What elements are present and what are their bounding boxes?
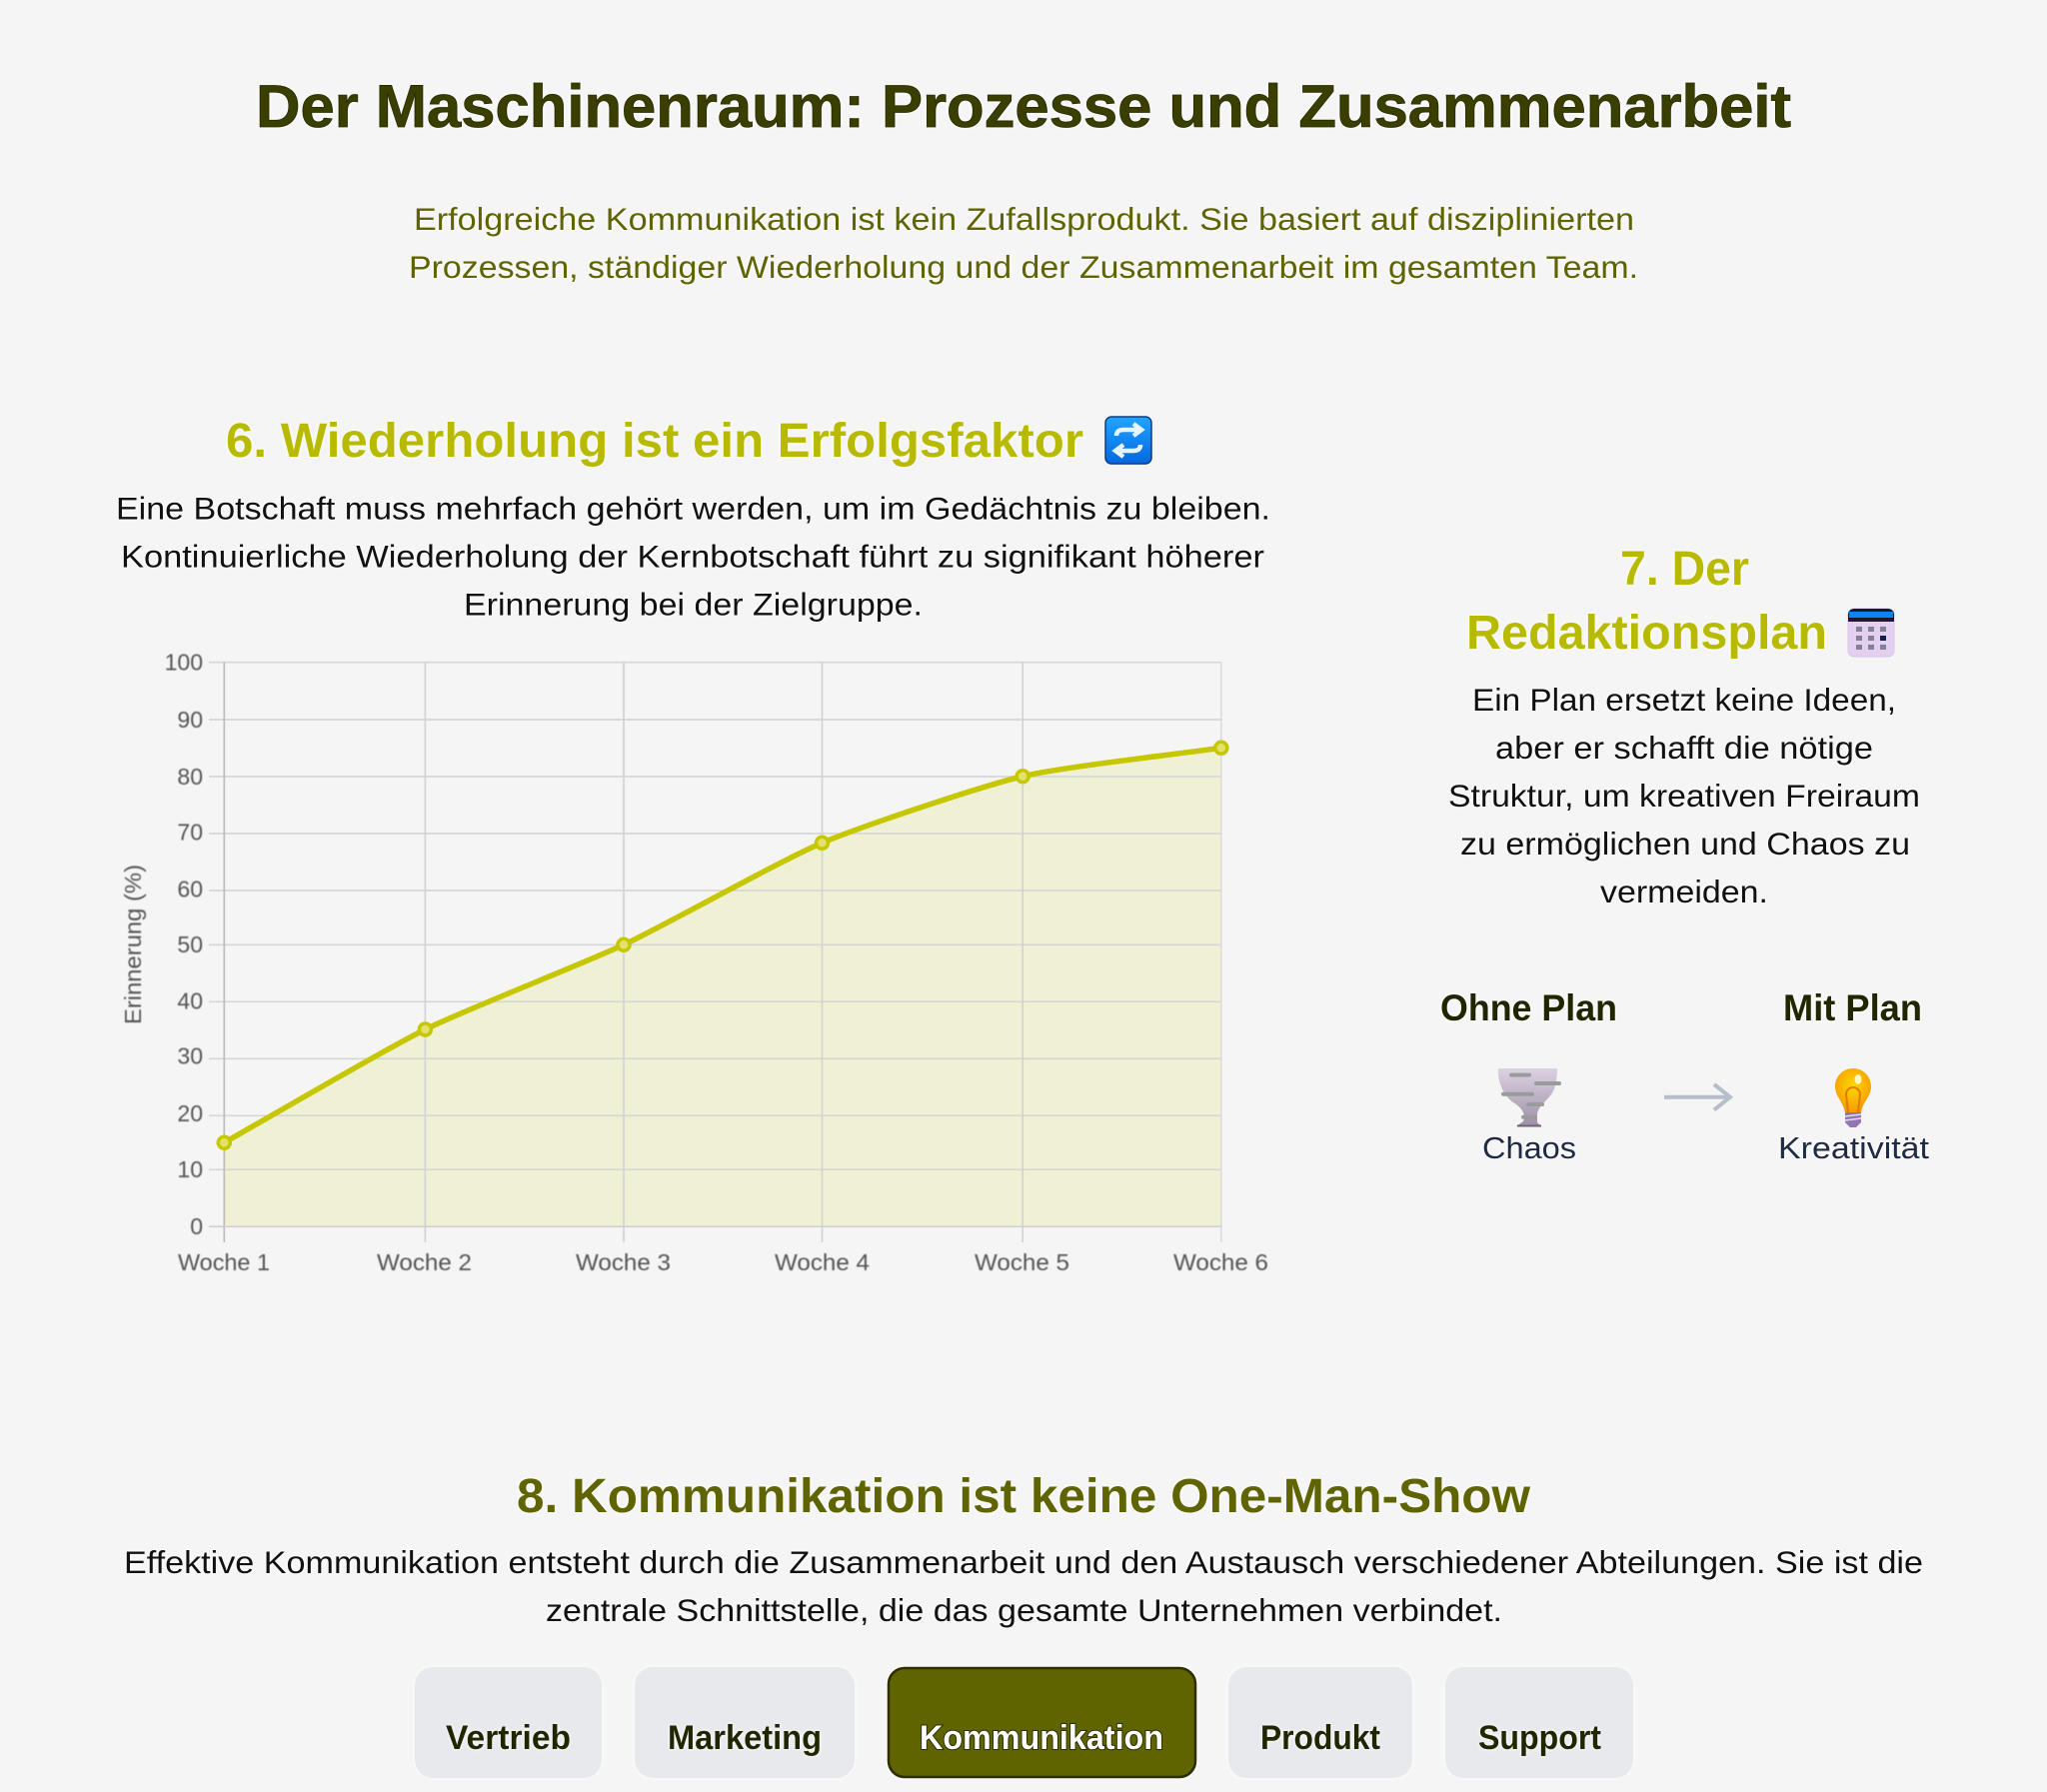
label: Chaos: Chaos bbox=[1482, 1130, 1576, 1165]
text block: section 7: Struktur, um kreativen Freiraum bbox=[1448, 778, 1920, 814]
y axis labels bbox=[165, 650, 203, 1239]
data points bbox=[218, 742, 1227, 1148]
department: Kommunikation (highlighted) bbox=[889, 1668, 1195, 1777]
intro text bbox=[409, 201, 1638, 285]
department: Kommunikation (highlighted): Kommunikation bbox=[920, 1719, 1163, 1757]
y axis labels: 20 bbox=[177, 1100, 203, 1126]
icon: repeat bbox=[1105, 417, 1151, 464]
x axis labels: Woche 3 bbox=[576, 1249, 671, 1275]
chart grid bbox=[209, 663, 1221, 1242]
intro text: Erfolgreiche Kommunikation ist kein Zufallsprodukt. Sie basiert auf disziplinierten bbox=[414, 201, 1634, 237]
x axis labels: Woche 5 bbox=[975, 1249, 1069, 1275]
text block: section 6: Eine Botschaft muss mehrfach gehört werden, um im Gedächtnis zu bleiben. bbox=[116, 490, 1270, 526]
text block: section 6: Erinnerung bei der Zielgruppe. bbox=[464, 586, 923, 622]
icon: calendar bbox=[1848, 609, 1894, 657]
heading: section 7 bbox=[1466, 543, 1827, 660]
department: Marketing bbox=[635, 1667, 855, 1778]
department: Vertrieb bbox=[415, 1667, 602, 1778]
y axis labels: 40 bbox=[177, 987, 203, 1013]
x axis labels bbox=[178, 1249, 1268, 1275]
y axis labels: 30 bbox=[177, 1043, 203, 1069]
text block: section 7 bbox=[1448, 682, 1920, 909]
comparison: without plan bbox=[1440, 987, 1617, 1165]
department: Produkt: Produkt bbox=[1260, 1719, 1380, 1757]
data line bbox=[224, 748, 1221, 1142]
department: Marketing: Marketing bbox=[668, 1719, 822, 1757]
label: Kreativität: Kreativität bbox=[1778, 1130, 1929, 1165]
x axis labels: Woche 4 bbox=[775, 1249, 870, 1275]
text block: section 7: Ein Plan ersetzt keine Ideen, bbox=[1472, 682, 1896, 718]
text block: section 6 bbox=[116, 490, 1270, 622]
x axis labels: Woche 2 bbox=[377, 1249, 472, 1275]
arrow bbox=[1664, 1084, 1730, 1109]
icon: light bulb bbox=[1835, 1068, 1871, 1127]
text block: section 6: Kontinuierliche Wiederholung der Kernbotschaft führt zu signifikant höherer bbox=[121, 538, 1264, 574]
department: Vertrieb: Vertrieb bbox=[446, 1719, 571, 1757]
heading: section 7: Redaktionsplan bbox=[1466, 607, 1827, 660]
text block: section 7: aber er schafft die nötige bbox=[1495, 730, 1873, 766]
y axis labels: 80 bbox=[177, 764, 203, 790]
text block: section 8: zentrale Schnittstelle, die das gesamte Unternehmen verbindet. bbox=[546, 1592, 1502, 1628]
y axis title: Erinnerung (%) bbox=[120, 865, 146, 1024]
y axis labels: 0 bbox=[190, 1213, 203, 1239]
text block: section 8: Effektive Kommunikation entsteht durch die Zusammenarbeit und den Austausch verschiedener Abteilungen. Sie ist die bbox=[124, 1544, 1923, 1580]
panel: section 8 collaboration bbox=[124, 1470, 1923, 1778]
heading: section 8: 8. Kommunikation ist keine One-Man-Show bbox=[517, 1470, 1531, 1523]
heading: section 7: 7. Der bbox=[1620, 543, 1749, 596]
department: Support bbox=[1445, 1667, 1633, 1778]
chart area fill bbox=[224, 748, 1221, 1226]
text block: section 7: zu ermöglichen und Chaos zu bbox=[1460, 826, 1910, 862]
department: Support: Support bbox=[1478, 1719, 1601, 1757]
text block: section 7: vermeiden. bbox=[1600, 874, 1768, 909]
heading: section 6: 6. Wiederholung ist ein Erfolgsfaktor bbox=[226, 415, 1083, 468]
y axis labels: 10 bbox=[177, 1156, 203, 1182]
y axis labels: 100 bbox=[165, 650, 203, 676]
text block: section 8 bbox=[124, 1544, 1923, 1628]
line chart: recall by week bbox=[120, 650, 1268, 1275]
label: Ohne Plan: Ohne Plan bbox=[1440, 987, 1617, 1028]
x axis labels: Woche 1 bbox=[178, 1249, 270, 1275]
x axis labels: Woche 6 bbox=[1173, 1249, 1268, 1275]
y axis labels: 60 bbox=[177, 876, 203, 901]
label: Mit Plan: Mit Plan bbox=[1783, 987, 1922, 1028]
icon: tornado bbox=[1498, 1068, 1559, 1126]
y axis labels: 90 bbox=[177, 707, 203, 733]
department: Produkt bbox=[1228, 1667, 1412, 1778]
y axis labels: 70 bbox=[177, 820, 203, 846]
comparison: with plan bbox=[1778, 987, 1929, 1165]
title: Der Maschinenraum: Prozesse und Zusammenarbeit bbox=[256, 73, 1791, 140]
panel: section 6 repetition bbox=[116, 415, 1270, 1275]
intro text: Prozessen, ständiger Wiederholung und der Zusammenarbeit im gesamten Team. bbox=[409, 249, 1638, 285]
panel: section 7 editorial plan bbox=[1440, 543, 1929, 1165]
y axis labels: 50 bbox=[177, 931, 203, 957]
